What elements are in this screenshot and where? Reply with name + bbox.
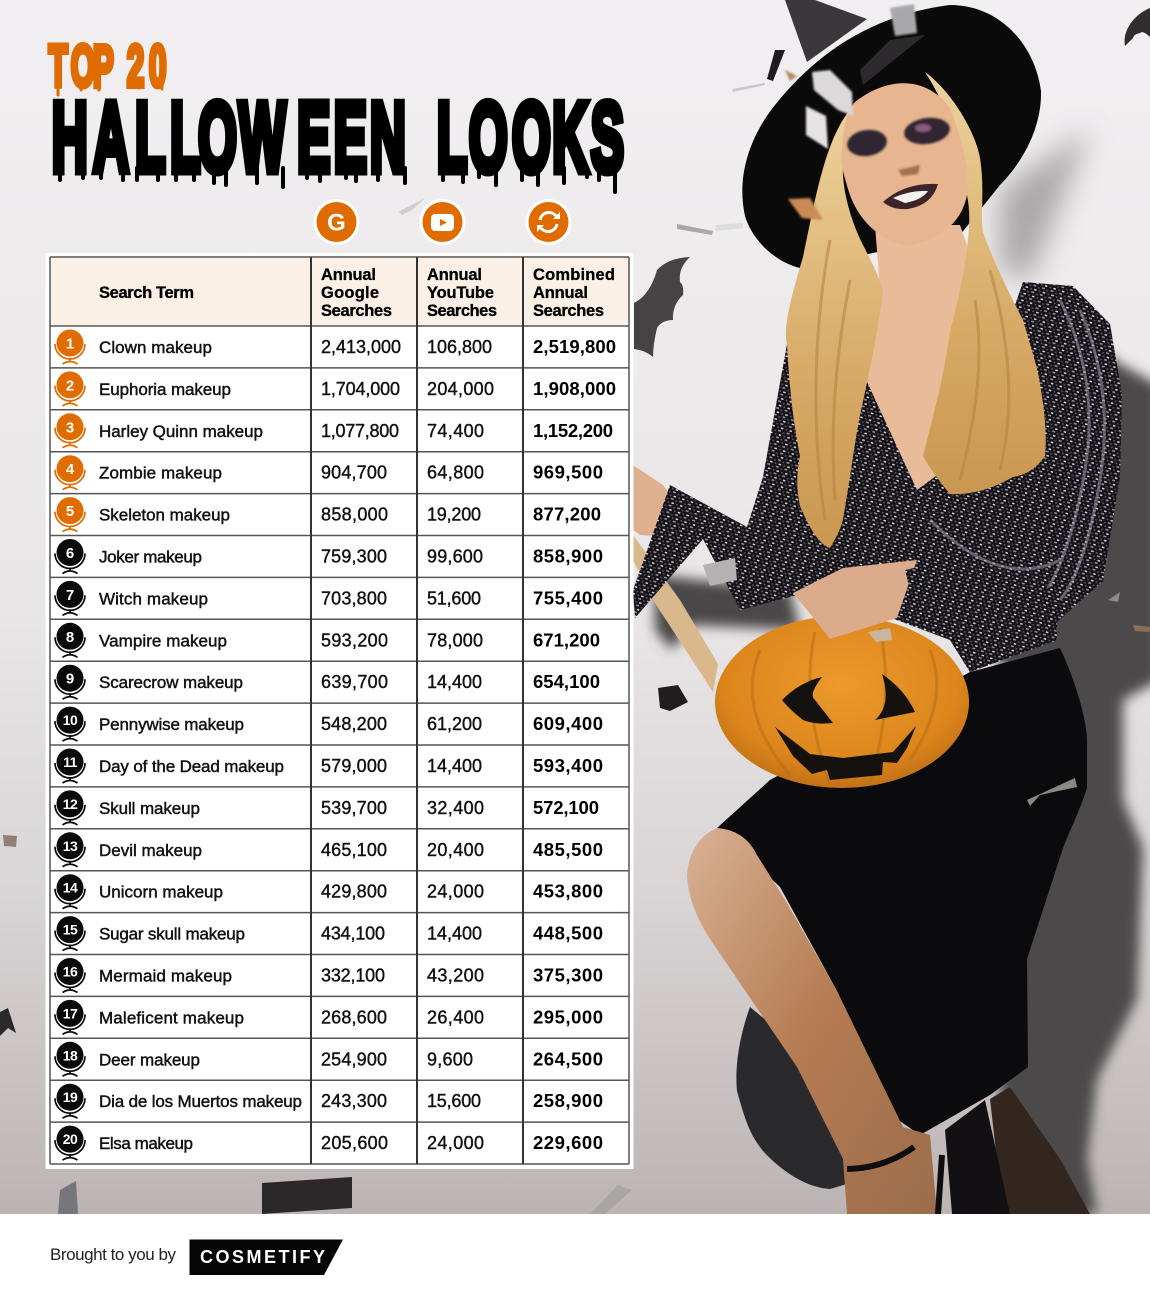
row 5: Skeleton makeup (99, 506, 230, 525)
row 17: 17 (63, 1005, 78, 1021)
icon: YouTube (420, 199, 466, 245)
sleeve tag (703, 558, 737, 586)
row 1: 106,800 (427, 337, 492, 357)
row 13: 13 (63, 838, 78, 854)
row 8 (55, 623, 600, 657)
row 15 (55, 916, 603, 951)
row 1 (55, 330, 616, 364)
row 12 (55, 790, 599, 825)
row 1: 2,413,000 (321, 337, 401, 357)
row 10: 548,200 (321, 714, 387, 734)
row 18: 18 (63, 1047, 78, 1063)
row 6: 99,600 (427, 546, 483, 566)
icon: Google (314, 199, 360, 245)
row 11: 14,400 (427, 756, 482, 776)
row 14 (55, 874, 603, 909)
row 16: 375,300 (533, 964, 603, 986)
row 11: 593,400 (533, 755, 603, 776)
row 11: 579,000 (321, 756, 387, 776)
row 17: 268,600 (321, 1007, 387, 1027)
sequin top (633, 282, 1122, 672)
row 5: 858,000 (321, 505, 388, 525)
row 16 (55, 958, 603, 992)
sleeve cuff over pumpkin (905, 560, 1057, 672)
row 2: Euphoria makeup (99, 380, 231, 399)
row 19: 258,900 (533, 1090, 603, 1111)
row 11: 11 (63, 754, 78, 770)
row 4: 969,500 (533, 462, 603, 483)
row 9 (55, 665, 600, 699)
row 8: 671,200 (533, 629, 600, 650)
row 12: 32,400 (427, 798, 484, 818)
row 10: 61,200 (427, 714, 482, 734)
row 7: 755,400 (533, 587, 603, 608)
broom bristles (990, 1087, 1090, 1214)
row 10 (55, 707, 603, 741)
row 8: Vampire makeup (99, 631, 227, 650)
table header: YouTube (427, 284, 494, 302)
row 7: 7 (66, 587, 74, 604)
row 20 (55, 1126, 603, 1160)
table header: Annual (427, 266, 482, 284)
row 13: 485,500 (533, 839, 603, 860)
tulle skirt hem (736, 1007, 860, 1189)
row 8: 8 (66, 629, 74, 646)
title line: Top 20: TOP 20 (49, 34, 166, 98)
row 6: 759,300 (321, 546, 387, 566)
skirt (717, 648, 1087, 1135)
bat top right (1125, 8, 1150, 46)
row 3: 1,152,200 (533, 420, 613, 441)
leg (687, 828, 937, 1214)
hair (786, 72, 1046, 548)
row 20: 20 (63, 1131, 78, 1147)
row 13: 20,400 (427, 840, 484, 860)
row 12: Skull makeup (99, 799, 200, 818)
row 11: Day of the Dead makeup (99, 757, 284, 776)
row 16: 332,100 (321, 966, 385, 986)
row 20: 205,600 (321, 1133, 388, 1153)
row 5: 877,200 (533, 504, 601, 525)
table header: Searches (427, 302, 497, 320)
row 14: 429,800 (321, 882, 387, 902)
row 19: Dia de los Muertos makeup (99, 1092, 302, 1111)
row 2: 204,000 (427, 379, 494, 399)
row 7 (55, 581, 603, 615)
cosmetify logo (190, 1240, 343, 1275)
row 3: 3 (66, 419, 74, 436)
wall shadows (655, 129, 1150, 1214)
icon: combined refresh (526, 199, 572, 245)
table header: Annual (321, 266, 376, 284)
row 16: Mermaid makeup (99, 966, 232, 986)
hand (793, 560, 917, 639)
nose shadow (898, 165, 920, 176)
row 9: 654,100 (533, 671, 600, 692)
row 18: 254,900 (321, 1049, 387, 1069)
table header: Combined (533, 266, 615, 284)
row 14: 24,000 (427, 882, 484, 902)
table frame (46, 253, 634, 1169)
row 9: 9 (66, 671, 74, 688)
row 17: 26,400 (427, 1007, 484, 1027)
row 15: 14,400 (427, 924, 482, 944)
row 7: Witch makeup (99, 589, 208, 608)
icon: Google: G (327, 210, 346, 236)
row 3: 74,400 (427, 421, 484, 441)
pumpkin mouth (775, 726, 916, 780)
row 1: Clown makeup (99, 338, 212, 357)
row 2: 2 (66, 377, 74, 394)
row 1: 2,519,800 (533, 336, 616, 357)
shoe strap and heel (847, 1147, 942, 1214)
row 5 (55, 497, 601, 532)
hat cone (785, 0, 867, 62)
row 14: 14 (63, 880, 78, 896)
row 18 (55, 1042, 603, 1076)
eyes and brows (845, 115, 952, 159)
arm (633, 465, 703, 539)
row 17: 295,000 (533, 1006, 603, 1027)
row 2: 1,908,000 (533, 378, 616, 399)
row 4: 4 (66, 461, 75, 478)
row 18: 264,500 (533, 1048, 603, 1069)
row 1: 1 (66, 336, 74, 352)
row 8: 78,000 (427, 630, 483, 650)
row 13: 465,100 (321, 840, 387, 860)
row 6 (55, 539, 603, 574)
row 15: 448,500 (533, 923, 603, 944)
row 3 (55, 413, 613, 448)
row 15: 15 (63, 922, 78, 938)
illustration: witch woman with pumpkin (633, 0, 1122, 1214)
table header: Search Term (99, 284, 194, 302)
pumpkin (715, 616, 969, 788)
row 18: Deer makeup (99, 1050, 200, 1069)
row 9: 639,700 (321, 672, 388, 692)
row 4: 904,700 (321, 463, 387, 483)
table header: Google (321, 284, 379, 302)
row 19 (55, 1084, 603, 1118)
hat confetti (785, 4, 917, 220)
row 8: 593,200 (321, 630, 388, 650)
teeth (893, 191, 928, 203)
table header: Searches (321, 302, 392, 320)
row 12: 12 (63, 796, 78, 812)
row 4 (55, 455, 603, 490)
small pumpkin tag (868, 628, 892, 642)
row 16: 43,200 (427, 966, 484, 986)
lips (883, 184, 938, 209)
row 19: 19 (63, 1089, 78, 1105)
bat left of woman (634, 257, 690, 357)
row 17: Maleficent makeup (99, 1008, 244, 1027)
bat bottom left (0, 1008, 16, 1036)
row 14: Unicorn makeup (99, 883, 223, 902)
table header: Annual (533, 284, 588, 302)
row 13: Devil makeup (99, 841, 202, 860)
row 9: 14,400 (427, 672, 482, 692)
row 12: 572,100 (533, 797, 599, 818)
row 6: Joker makeup (99, 548, 202, 566)
row 5: 5 (66, 503, 74, 520)
chest and neck (863, 225, 1000, 490)
row 10: 10 (63, 712, 78, 728)
title line: Halloween Looks: HALLOWEENLOOKS (52, 84, 624, 192)
row 3: 1,077,800 (321, 421, 399, 441)
row 11 (55, 748, 603, 783)
footer credit text: Brought to you by (50, 1245, 176, 1264)
footer band (0, 1214, 1150, 1300)
title (49, 34, 624, 192)
row 20: Elsa makeup (99, 1134, 193, 1153)
row 16: 16 (63, 964, 78, 980)
row 19: 243,300 (321, 1091, 387, 1111)
row 15: 434,100 (321, 924, 385, 944)
row 7: 51,600 (427, 588, 481, 608)
row 2 (55, 371, 616, 406)
table header: Searches (533, 302, 604, 320)
row 20: 229,600 (533, 1132, 603, 1153)
table header (50, 257, 629, 326)
pumpkin right eye (875, 674, 915, 720)
cosmetify logo: COSMETIFY (200, 1247, 325, 1267)
hat brim (742, 5, 1041, 268)
row 10: 609,400 (533, 713, 603, 734)
row 7: 703,800 (321, 588, 387, 608)
row 2: 1,704,000 (321, 379, 400, 399)
row 4: 64,800 (427, 463, 484, 483)
row 19: 15,600 (427, 1091, 481, 1111)
face (841, 83, 968, 246)
row 6: 858,900 (533, 546, 603, 566)
row 15: Sugar skull makeup (99, 925, 245, 944)
row 3: Harley Quinn makeup (99, 422, 263, 441)
row 13 (55, 832, 603, 867)
row 17 (55, 1000, 603, 1034)
row 12: 539,700 (321, 798, 387, 818)
row 20: 24,000 (427, 1133, 484, 1153)
row 18: 9,600 (427, 1049, 473, 1069)
broom handle (633, 535, 718, 692)
row 9: Scarecrow makeup (99, 673, 243, 692)
row 14: 453,800 (533, 881, 603, 902)
row 10: Pennywise makeup (99, 715, 244, 734)
pumpkin left eye (782, 677, 833, 724)
row 5: 19,200 (427, 505, 481, 525)
row 4: Zombie makeup (99, 464, 222, 483)
table (46, 253, 634, 1169)
row 6: 6 (66, 545, 74, 562)
